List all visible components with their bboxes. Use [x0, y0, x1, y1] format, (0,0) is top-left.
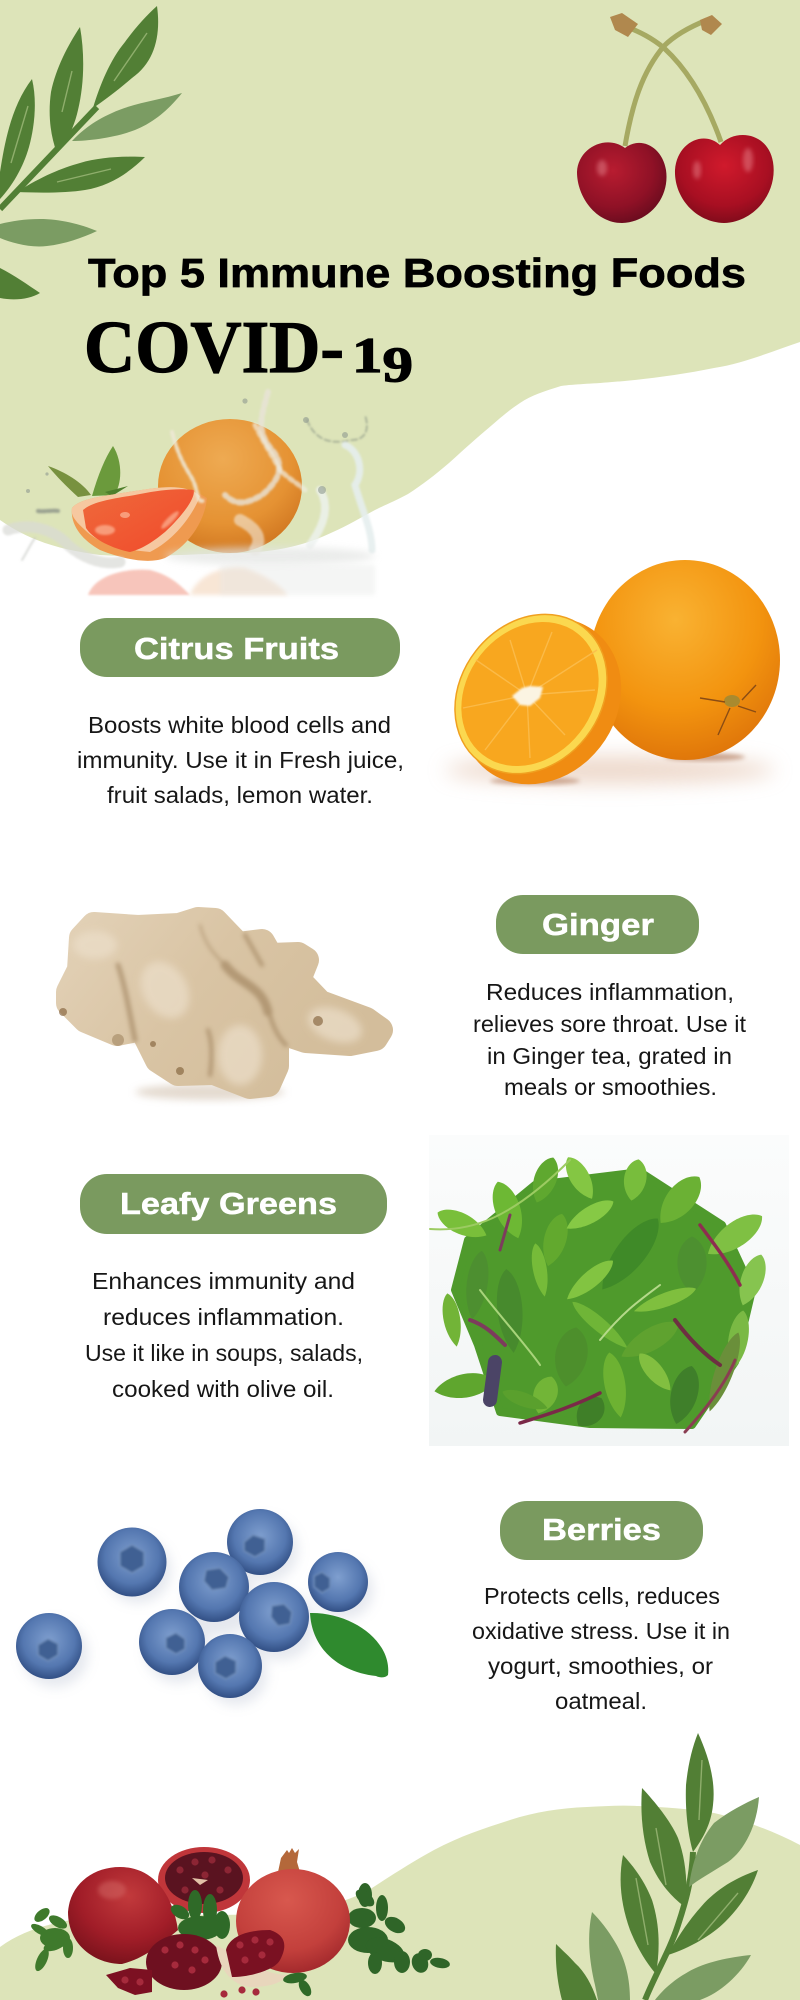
top green background wave [0, 0, 800, 556]
text: citrus description: Boosts white blood cells and [88, 712, 391, 738]
pill: Ginger: Ginger [542, 907, 654, 942]
seed cluster white peel [216, 1945, 288, 1987]
cut face rim [424, 584, 638, 804]
text: ginger description [473, 979, 747, 1100]
image: leafy greens salad [429, 1135, 789, 1446]
right herb sprig [348, 1883, 451, 1975]
text: ginger description: Reduces inflammation, [486, 979, 734, 1005]
text: berries description: yogurt, smoothies, or [488, 1653, 713, 1679]
mint leaves [48, 446, 128, 497]
bottom green background wave [0, 1806, 800, 2000]
pill: Leafy Greens [80, 1174, 387, 1234]
icon: bottom-right leaf branch [556, 1733, 759, 2000]
image: ginger root [59, 920, 380, 1100]
heading: COVID-19: COVID- [84, 307, 344, 389]
purple leaves and stems [430, 1160, 740, 1432]
salad base mass [455, 1172, 752, 1425]
green leaf [310, 1613, 388, 1677]
pill: Citrus Fruits: Citrus Fruits [134, 631, 339, 666]
pill: Citrus Fruits [80, 618, 400, 677]
image: citrus oranges [424, 560, 780, 817]
pill: Berries: Berries [542, 1512, 661, 1547]
cherry stems [610, 13, 722, 146]
text: leafy greens description [85, 1268, 363, 1402]
image: blueberries [16, 1509, 388, 1705]
text: ginger description: relieves sore throat. Use it [473, 1011, 747, 1037]
text: citrus description: immunity. Use it in Fresh juice, [77, 747, 404, 773]
pill: Ginger [496, 895, 699, 954]
salad leaves [432, 1152, 772, 1434]
image: pomegranates [29, 1847, 451, 1998]
loose seeds [106, 1968, 152, 1995]
orange stem mark [700, 685, 756, 735]
icon: cherries [577, 13, 774, 223]
berries [98, 1528, 166, 1596]
ginger nodes [59, 1008, 323, 1075]
heading: COVID-19: 9 [382, 336, 413, 392]
icon: top-left leaf branch [0, 6, 182, 299]
slice reflection [88, 570, 190, 595]
open pomegranate [158, 1847, 250, 1913]
text: ginger description: in Ginger tea, grated in [487, 1043, 732, 1069]
text: berries description: oatmeal. [555, 1688, 647, 1714]
cherry highlights [597, 148, 753, 179]
ginger creases [118, 925, 286, 1075]
text: citrus description: fruit salads, lemon water. [107, 782, 373, 808]
text: berries description [472, 1583, 730, 1714]
text: ginger description: meals or smoothies. [504, 1074, 717, 1100]
cut half body [428, 585, 654, 817]
text: berries description: Protects cells, reduces [484, 1583, 720, 1609]
water splash [8, 392, 372, 563]
pill: Leafy Greens: Leafy Greens [120, 1186, 337, 1221]
text: leafy greens description: Use it like in soups, salads, [85, 1340, 363, 1366]
text: leafy greens description: cooked with olive oil. [112, 1376, 334, 1402]
centre leaves [168, 1890, 230, 1940]
lower leaf sprig [282, 1971, 314, 1998]
right pomegranate [236, 1869, 350, 1973]
image: grapefruit with water splash [8, 392, 375, 595]
text: berries description: oxidative stress. Use it in [472, 1618, 730, 1644]
heading: COVID-19: 1 [352, 327, 377, 383]
left cherry [577, 142, 667, 223]
pill: Berries [500, 1501, 703, 1560]
segment lines [463, 632, 597, 758]
right cherry [675, 135, 774, 223]
text: citrus description [77, 712, 404, 808]
whole orange [590, 560, 780, 760]
salad backdrop [429, 1135, 789, 1446]
seed cluster right [226, 1930, 284, 1977]
white pith [192, 1878, 208, 1885]
right pomegranate crown [278, 1848, 300, 1872]
cut face flesh [433, 595, 627, 793]
whole grapefruit [158, 419, 302, 553]
ginger highlights [73, 931, 367, 1085]
text: leafy greens description: reduces inflammation. [103, 1304, 344, 1330]
seed cluster left [146, 1934, 222, 1990]
seed glints [121, 1936, 274, 1998]
slice glints [95, 509, 181, 535]
title: Top 5 Immune Boosting Foods [88, 250, 746, 296]
water pool [165, 547, 375, 565]
text: leafy greens description: Enhances immunity and [92, 1268, 355, 1294]
orange centre pith [512, 686, 543, 706]
left herb sprig [29, 1905, 73, 1973]
ginger shadow [135, 1084, 285, 1100]
grapefruit slice [72, 487, 207, 561]
water droplets [26, 398, 348, 494]
berry calyxes [38, 1535, 330, 1679]
open pomegranate seed glints [176, 1856, 232, 1894]
left pomegranate [68, 1867, 178, 1964]
ginger body [69, 920, 380, 1086]
berry shadows [22, 1518, 373, 1705]
shadow [445, 756, 775, 784]
